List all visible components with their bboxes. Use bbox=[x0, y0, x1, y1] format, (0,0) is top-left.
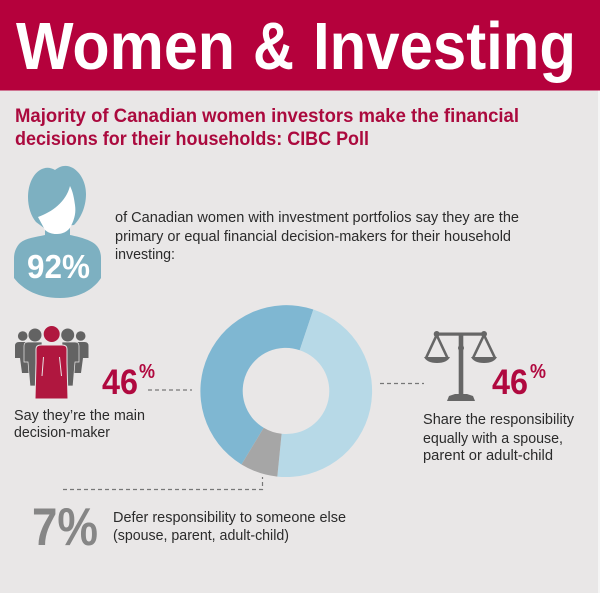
label: share responsibility: Share the responsibility bbox=[423, 411, 574, 428]
label: share responsibility: equally with a spouse, bbox=[423, 430, 563, 447]
intro text: of Canadian women with investment portfolios say they are the bbox=[115, 209, 519, 226]
title banner: Women bbox=[16, 9, 235, 84]
label: share responsibility bbox=[423, 411, 574, 464]
stat: 46% main decision-maker bbox=[102, 361, 155, 402]
intro text: investing: bbox=[115, 246, 175, 263]
icon: woman with 92% bbox=[14, 166, 101, 298]
label: defer responsibility: (spouse, parent, adult-child) bbox=[113, 527, 289, 544]
subtitle bbox=[15, 106, 519, 150]
stat: 46% share responsibility bbox=[492, 361, 546, 402]
donut chart bbox=[200, 305, 372, 477]
subtitle: decisions for their households: CIBC Poll bbox=[15, 129, 369, 150]
stat: 7%: 7% bbox=[32, 498, 98, 557]
icon: scales bbox=[424, 331, 497, 401]
icon: group of people with woman in front bbox=[15, 326, 88, 399]
label: share responsibility: parent or adult-child bbox=[423, 447, 553, 464]
label: main decision-maker: decision-maker bbox=[14, 424, 110, 441]
stat: 46% main decision-maker: 46 bbox=[102, 363, 138, 402]
stat: 46% main decision-maker: % bbox=[139, 361, 155, 383]
title banner: Investing bbox=[313, 9, 576, 84]
title banner: & bbox=[253, 9, 294, 84]
stat: 46% share responsibility: 46 bbox=[492, 363, 528, 402]
92% label: 92% bbox=[27, 248, 90, 285]
title banner bbox=[0, 0, 600, 90]
intro text: primary or equal financial decision-makers for their household bbox=[115, 228, 511, 245]
stat: 46% share responsibility: % bbox=[530, 361, 546, 383]
label: main decision-maker bbox=[14, 407, 145, 441]
subtitle: Majority of Canadian women investors make the financial bbox=[15, 106, 519, 127]
label: main decision-maker: Say they’re the main bbox=[14, 407, 145, 424]
label: defer responsibility bbox=[113, 509, 346, 544]
intro text bbox=[115, 209, 519, 263]
label: defer responsibility: Defer responsibility to someone else bbox=[113, 509, 346, 526]
